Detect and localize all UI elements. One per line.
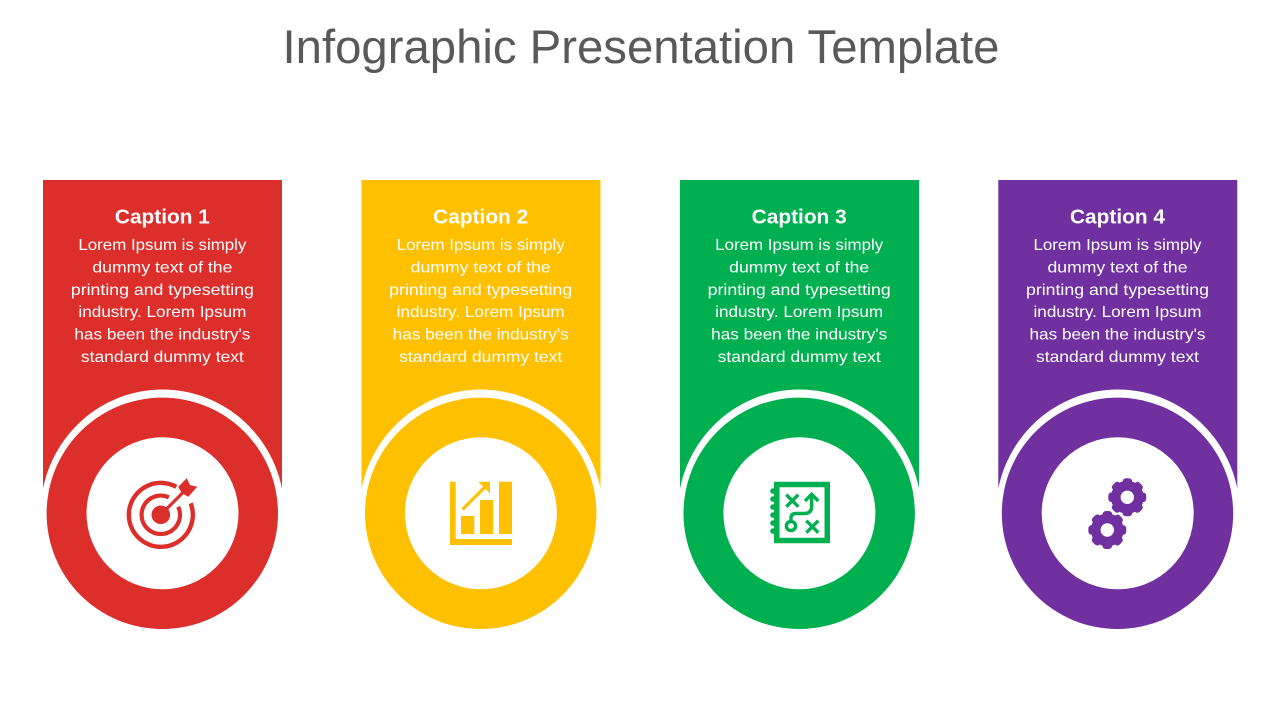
panel 4 text: standard dummy text <box>1036 349 1200 366</box>
panel 4 heading: Caption 4 <box>1070 206 1166 228</box>
panel 3 icon disc <box>723 437 875 589</box>
panel 2 text: standard dummy text <box>399 349 563 366</box>
panel 3 text: industry. Lorem Ipsum <box>715 304 883 321</box>
panel 4 text <box>1026 237 1209 366</box>
panel 1 white arc <box>40 390 284 638</box>
panel 1 text: industry. Lorem Ipsum <box>78 304 246 321</box>
panel 3 text: Lorem Ipsum is simply <box>715 237 883 254</box>
panel 3 text: standard dummy text <box>718 349 881 366</box>
panel: caption 1 <box>40 180 284 638</box>
panel 4 icon disc <box>1042 437 1194 589</box>
icon: two gears <box>1090 480 1145 548</box>
panel 2 text: printing and typesetting <box>389 282 572 299</box>
panel 2 icon disc <box>405 437 557 589</box>
panel: caption 4 <box>996 180 1240 638</box>
icon: target with arrow <box>129 478 197 547</box>
panel 3 background <box>680 180 919 495</box>
panel 4 ring <box>1002 398 1233 629</box>
panel 1 text: Lorem Ipsum is simply <box>78 237 246 254</box>
panel 1 heading: Caption 1 <box>115 206 210 228</box>
panel 1 icon disc <box>86 437 238 589</box>
panel 3 heading: Caption 3 <box>752 206 847 228</box>
panel 4 text: has been the industry's <box>1030 326 1206 344</box>
panel 3 text <box>708 237 891 366</box>
panel 2 heading: Caption 2 <box>433 206 528 228</box>
panel 2 white arc <box>359 390 603 638</box>
panel 2 background <box>362 180 600 495</box>
panel 3 text: dummy text of the <box>729 260 869 276</box>
panel 1 text <box>71 237 254 366</box>
panel 4 text: industry. Lorem Ipsum <box>1034 304 1202 321</box>
panel: caption 2 <box>359 180 603 638</box>
panel 4 text: dummy text of the <box>1048 260 1188 276</box>
panel 1 background <box>43 180 282 495</box>
panel 3 white arc <box>678 390 922 638</box>
panel 3 text: has been the industry's <box>711 326 887 344</box>
panel 1 text: dummy text of the <box>92 260 233 276</box>
panel 1 text: has been the industry's <box>74 326 250 344</box>
panel 4 white arc <box>996 390 1240 638</box>
panel 4 text: printing and typesetting <box>1026 282 1209 299</box>
panel 4 background <box>998 180 1237 495</box>
icon: strategy playbook <box>770 484 827 540</box>
panel 1 ring <box>47 398 278 629</box>
panel 2 text: industry. Lorem Ipsum <box>397 304 565 321</box>
icon: rising bar chart <box>450 482 512 545</box>
title: Infographic Presentation Template <box>282 20 999 73</box>
panel 2 text <box>389 237 572 366</box>
panel 2 text: has been the industry's <box>393 326 569 344</box>
panel 1 text: standard dummy text <box>81 349 244 366</box>
panel: caption 3 <box>678 180 922 638</box>
panel 2 text: dummy text of the <box>411 260 551 276</box>
panel 3 text: printing and typesetting <box>708 282 891 299</box>
panel 2 text: Lorem Ipsum is simply <box>397 237 565 254</box>
panel 3 ring <box>684 398 915 629</box>
panel 2 ring <box>365 398 596 629</box>
panel 4 text: Lorem Ipsum is simply <box>1034 237 1202 254</box>
panel 1 text: printing and typesetting <box>71 282 254 299</box>
